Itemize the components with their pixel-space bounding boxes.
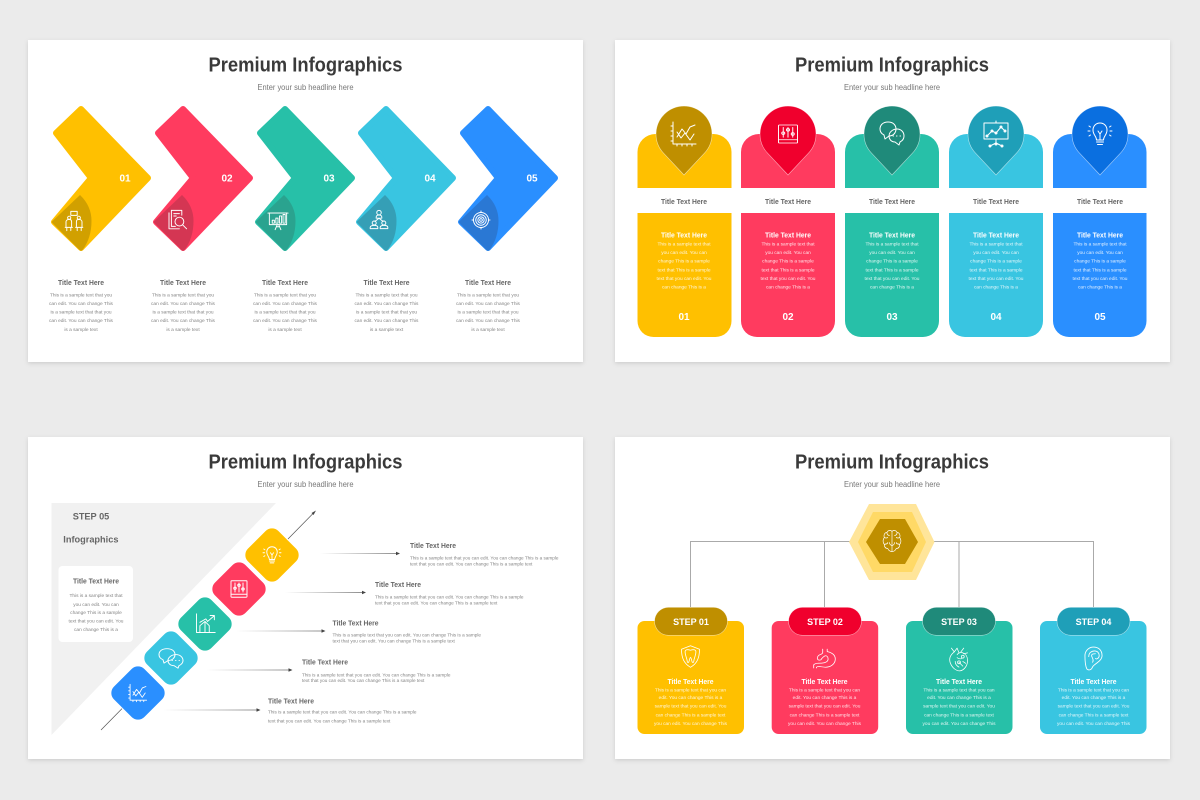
- side card: Title Text Here: [73, 576, 119, 586]
- text block 03: is a sample text: [268, 327, 302, 333]
- column 04: can change This is a: [974, 285, 1018, 291]
- text block 01: can edit. You can change This: [49, 301, 114, 307]
- chevron 04: 04: [424, 174, 436, 184]
- column 01: can change This is a: [662, 285, 706, 291]
- text block 04: is a sample text: [370, 327, 404, 333]
- card step 03: [906, 607, 1012, 734]
- card step 04: edit. You can change This is a: [1062, 695, 1126, 701]
- text block 02: is a sample text that that you: [152, 310, 214, 316]
- text block 3: [332, 619, 481, 644]
- card step 04: This is a sample text that you can: [1058, 688, 1129, 694]
- text block 1: This is a sample text that you can edit. You can change This is a sample: [410, 556, 559, 561]
- text block 05: is a sample text: [471, 327, 505, 333]
- subtitle: Enter your sub headline here: [258, 83, 354, 92]
- text block 01: [49, 278, 114, 333]
- panel: diagonal steps: [28, 437, 583, 759]
- text block 03: can edit. You can change This: [253, 318, 318, 324]
- column 04: 04: [990, 312, 1002, 323]
- infographics label: Infographics: [63, 534, 118, 544]
- card step 04: STEP 04: [1076, 617, 1111, 627]
- card step 03: can change This is a sample text: [924, 712, 995, 718]
- card step 02: [772, 607, 878, 734]
- card step 04: sample text that you can edit. You: [1058, 704, 1130, 710]
- card step 04: [1040, 607, 1146, 734]
- column 02: can change This is a: [766, 285, 810, 291]
- text block 2: Title Text Here: [375, 580, 421, 589]
- text block 04: can edit. You can change This: [355, 318, 419, 324]
- card step 03: This is a sample text that you can: [923, 688, 995, 694]
- column 02: you can edit. You can: [765, 250, 811, 256]
- column 03: can change This is a: [870, 285, 914, 291]
- column 03: change This is a sample: [866, 259, 918, 265]
- column 04: Title Text Here: [973, 230, 1019, 240]
- column 05: [1053, 106, 1146, 337]
- text block 5: text that you can edit. You can change This is a sample text: [268, 719, 391, 724]
- column 02: Title Text Here: [765, 230, 811, 240]
- text block 02: can edit. You can change This: [151, 301, 216, 307]
- text block 04: is a sample text that that you: [356, 310, 417, 316]
- text block 01: is a sample text that that you: [50, 310, 112, 316]
- chevron 05: [458, 109, 555, 251]
- column 01: text that This is a sample: [658, 267, 711, 273]
- text block 05: [456, 278, 521, 333]
- text block 04: can edit. You can change This: [355, 301, 419, 307]
- column 01: Title Text Here: [661, 230, 707, 240]
- diamond step: sky: [141, 628, 201, 688]
- card step 01: sample text that you can edit. You: [655, 704, 727, 710]
- side card: [58, 566, 133, 642]
- text block 03: can edit. You can change This: [253, 301, 318, 307]
- column 05: text that This is a sample: [1074, 267, 1127, 273]
- card step 01: Title Text Here: [668, 677, 714, 686]
- text block 1: text that you can edit. You can change This is a sample text: [410, 562, 533, 567]
- grey triangle backdrop: [52, 503, 276, 735]
- title: Premium Infographics: [208, 452, 402, 474]
- text block 3: Title Text Here: [332, 619, 378, 628]
- text block 04: Title Text Here: [364, 278, 410, 287]
- card step 01: you can edit. You can change This: [654, 721, 728, 727]
- column 03: Title Text Here: [869, 197, 915, 206]
- column 03: text that This is a sample: [866, 267, 919, 273]
- text block 01: This is a sample text that you: [50, 293, 112, 299]
- text block 05: can edit. You can change This: [456, 318, 521, 324]
- side card: you can edit. You can: [73, 602, 119, 608]
- column 02: text that you can edit. You: [761, 276, 816, 282]
- card step 04: can change This is a sample text: [1059, 712, 1129, 718]
- panel: pin columns: [615, 40, 1170, 362]
- hexagon with brain icon: [849, 504, 934, 580]
- text block 02: [151, 278, 216, 333]
- chevron 02: [154, 109, 250, 251]
- chevron 02: 02: [221, 174, 233, 184]
- column 05: text that you can edit. You: [1073, 276, 1128, 282]
- column 03: This is a sample text that: [865, 242, 919, 248]
- text block 04: This is a sample text that you: [355, 293, 418, 299]
- text block 1: Title Text Here: [410, 541, 456, 550]
- panel: hexagon org chart: [615, 437, 1170, 759]
- text block 4: [302, 658, 451, 683]
- arrow 2: [285, 591, 366, 594]
- panel: chevron process: [28, 40, 583, 362]
- column 04: Title Text Here: [973, 197, 1019, 206]
- column 04: you can edit. You can: [973, 250, 1019, 256]
- column 01: This is a sample text that: [657, 242, 711, 248]
- text block 02: is a sample text: [166, 327, 200, 333]
- column 05: change This is a sample: [1074, 259, 1126, 265]
- subtitle: Enter your sub headline here: [844, 83, 941, 92]
- column 05: can change This is a: [1078, 285, 1122, 291]
- text block 4: This is a sample text that you can edit. You can change This is a sample: [302, 672, 451, 677]
- step label: STEP 05: [73, 512, 109, 522]
- card step 01: can change This is a sample text: [656, 712, 726, 718]
- column 04: change This is a sample: [970, 259, 1022, 265]
- column 05: you can edit. You can: [1077, 250, 1123, 256]
- column 03: you can edit. You can: [869, 250, 915, 256]
- card step 01: edit. You can change This is a: [659, 695, 723, 701]
- card step 04: you can edit. You can change This: [1057, 721, 1131, 727]
- arrow 4: [206, 668, 292, 672]
- text block 01: can edit. You can change This: [49, 318, 114, 324]
- column 01: [638, 106, 732, 337]
- card step 02: can change This is a sample text: [790, 712, 860, 718]
- column 01: 01: [678, 312, 690, 323]
- chevron 01: 01: [119, 174, 131, 184]
- card step 03: edit. You can change This is a: [927, 695, 991, 701]
- card step 03: Title Text Here: [936, 677, 982, 686]
- text block 4: Title Text Here: [302, 658, 348, 667]
- text block 05: This is a sample text that you: [457, 293, 519, 299]
- card step 03: sample text that you can edit. You: [923, 704, 995, 710]
- column 03: 03: [886, 312, 898, 323]
- diamond step: red: [209, 559, 269, 619]
- text block 02: Title Text Here: [160, 278, 206, 287]
- text block 03: is a sample text that that you: [254, 310, 316, 316]
- column 04: text that you can edit. You: [969, 276, 1024, 282]
- text block 5: This is a sample text that you can edit. You can change This is a sample: [268, 710, 417, 715]
- diamond step: yellow: [242, 525, 302, 585]
- column 01: text that you can edit. You: [657, 276, 712, 282]
- text block 05: is a sample text that that you: [457, 310, 519, 316]
- subtitle: Enter your sub headline here: [844, 480, 941, 489]
- column 02: change This is a sample: [762, 259, 814, 265]
- diamond step: teal: [175, 594, 235, 654]
- card step 01: STEP 01: [673, 617, 709, 627]
- card step 03: STEP 03: [941, 617, 977, 627]
- column 03: [845, 106, 939, 337]
- text block 3: This is a sample text that you can edit. You can change This is a sample: [332, 633, 481, 638]
- column 03: Title Text Here: [869, 230, 915, 240]
- text block 04: [355, 278, 419, 333]
- title: Premium Infographics: [795, 452, 989, 474]
- column 04: text that This is a sample: [970, 267, 1023, 273]
- diagonal arrow: [101, 510, 316, 730]
- chevron 05: 05: [526, 174, 538, 184]
- text block 03: [253, 278, 318, 333]
- card step 04: Title Text Here: [1070, 677, 1116, 686]
- column 04: [949, 106, 1043, 337]
- title: Premium Infographics: [208, 54, 402, 76]
- column 05: 05: [1094, 312, 1106, 323]
- text block 02: can edit. You can change This: [151, 318, 216, 324]
- column 02: 02: [782, 312, 794, 323]
- chevron 03: 03: [323, 174, 335, 184]
- column 02: text that This is a sample: [762, 267, 815, 273]
- text block 01: is a sample text: [64, 327, 98, 333]
- side card: change This is a sample: [70, 610, 122, 616]
- side card: text that you can edit. You: [69, 619, 124, 625]
- side card: can change This is a: [74, 627, 118, 633]
- chevron 04: [356, 109, 453, 251]
- card step 01: [638, 607, 744, 734]
- title: Premium Infographics: [795, 54, 989, 76]
- column 05: Title Text Here: [1077, 230, 1123, 240]
- card step 02: Title Text Here: [802, 677, 848, 686]
- arrow 1: [320, 552, 400, 555]
- text block 01: Title Text Here: [58, 278, 104, 287]
- text block 03: This is a sample text that you: [254, 293, 316, 299]
- column 04: This is a sample text that: [969, 242, 1023, 248]
- text block 05: Title Text Here: [465, 278, 511, 287]
- subtitle: Enter your sub headline here: [258, 480, 354, 489]
- column 05: This is a sample text that: [1073, 242, 1127, 248]
- column 03: text that you can edit. You: [865, 276, 920, 282]
- column 01: change This is a sample: [658, 259, 710, 265]
- text block 2: text that you can edit. You can change This is a sample text: [375, 601, 498, 606]
- text block 1: [410, 541, 559, 567]
- arrow 3: [236, 629, 326, 633]
- card step 02: sample text that you can edit. You: [789, 704, 861, 710]
- side card: This is a sample text that: [69, 593, 123, 599]
- card step 01: This is a sample text that you can: [655, 688, 726, 694]
- text block 05: can edit. You can change This: [456, 301, 521, 307]
- column 02: [741, 106, 835, 337]
- card step 02: you can edit. You can change This: [788, 721, 862, 727]
- chevron 01: [52, 109, 148, 251]
- text block 2: This is a sample text that you can edit. You can change This is a sample: [375, 595, 524, 600]
- column 02: Title Text Here: [765, 197, 811, 206]
- connector lines: [690, 542, 1094, 607]
- card step 02: This is a sample text that you can: [789, 688, 860, 694]
- arrow 5: [163, 708, 260, 712]
- text block 3: text that you can edit. You can change This is a sample text: [332, 639, 456, 644]
- card step 02: STEP 02: [807, 617, 843, 627]
- diamond step: blue: [108, 663, 168, 723]
- text block 2: [375, 580, 524, 606]
- column 05: Title Text Here: [1077, 197, 1123, 206]
- chevron 03: [256, 109, 352, 251]
- card step 02: edit. You can change This is a: [793, 695, 857, 701]
- column 02: This is a sample text that: [761, 242, 815, 248]
- card step 03: you can edit. You can change This: [922, 721, 996, 727]
- text block 5: Title Text Here: [268, 696, 314, 706]
- text block 5: [268, 696, 417, 724]
- column 01: Title Text Here: [661, 197, 707, 206]
- text block 4: text that you can edit. You can change This is a sample text: [302, 678, 425, 683]
- column 01: you can edit. You can: [661, 250, 707, 256]
- text block 02: This is a sample text that you: [152, 293, 214, 299]
- text block 03: Title Text Here: [262, 278, 308, 287]
